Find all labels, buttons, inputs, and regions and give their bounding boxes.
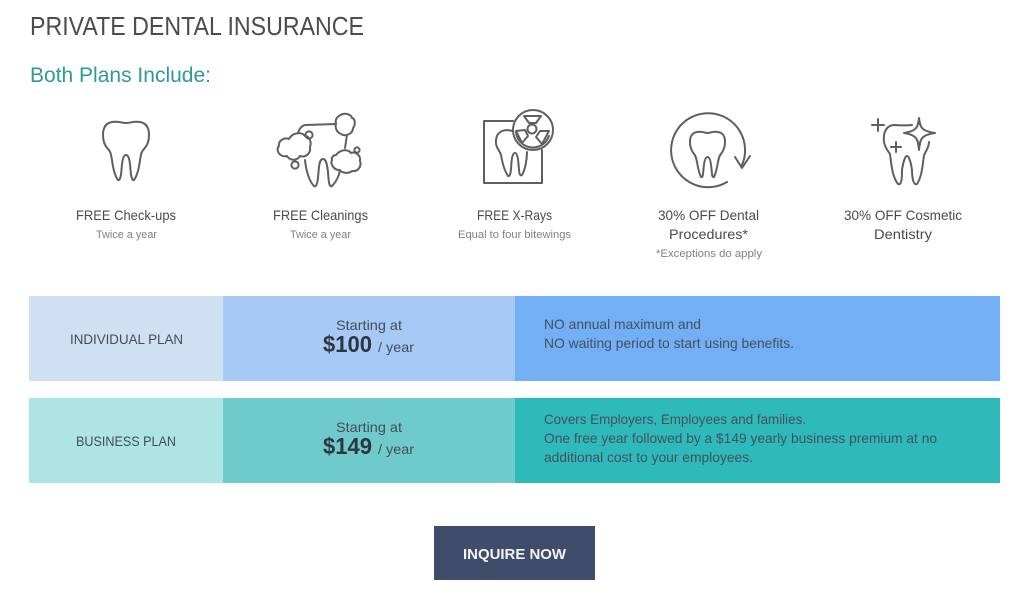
benefit: cosmetic dentistry: 30% OFF Cosmetic <box>844 207 962 223</box>
panel: business plan <box>29 398 1000 483</box>
benefit: cosmetic dentistry <box>844 118 962 242</box>
panel: business plan: / year <box>378 441 414 457</box>
benefit: cosmetic dentistry: Dentistry <box>874 226 932 242</box>
icon: tooth with bubbles <box>278 114 361 186</box>
benefit: dental procedures: 30% OFF Dental <box>658 207 759 223</box>
benefit: dental procedures: Procedures* <box>669 226 749 242</box>
button: inquire now: INQUIRE NOW <box>463 546 567 563</box>
title: PRIVATE DENTAL INSURANCE <box>30 11 364 41</box>
benefit: dental procedures: *Exceptions do apply <box>656 248 763 260</box>
panel: business plan: One free year followed by a $149 yearly business premium at no <box>544 430 937 446</box>
benefit: x-rays: FREE X-Rays <box>477 207 552 223</box>
button: inquire now <box>434 526 595 580</box>
benefit: check-ups <box>76 122 176 241</box>
panel: individual plan: INDIVIDUAL PLAN <box>70 331 183 347</box>
benefit: cleanings: Twice a year <box>290 229 351 241</box>
icon: x-ray with radiation symbol <box>484 110 553 183</box>
panel: business plan: $149 <box>323 433 372 459</box>
benefit: x-rays: Equal to four bitewings <box>458 229 571 241</box>
icon: tooth <box>103 122 149 180</box>
icon: tooth in circular arrow <box>671 113 750 187</box>
benefit: dental procedures <box>656 113 763 260</box>
panel: business plan: Covers Employers, Employees and families. <box>544 411 806 427</box>
icon: sparkling tooth <box>872 118 935 184</box>
panel: individual plan: $100 <box>323 331 372 357</box>
benefit: cleanings: FREE Cleanings <box>273 207 368 223</box>
panel: individual plan: NO annual maximum and <box>544 316 701 332</box>
benefit: check-ups: Twice a year <box>96 229 157 241</box>
panel: business plan: Starting at <box>336 419 402 435</box>
benefit: cleanings <box>273 114 368 241</box>
panel: individual plan <box>29 296 1000 381</box>
subheading: Both Plans Include: <box>30 64 211 87</box>
panel: individual plan: / year <box>378 339 414 355</box>
benefit: x-rays <box>458 110 571 241</box>
panel: business plan: BUSINESS PLAN <box>76 433 176 449</box>
panel: business plan: additional cost to your employees. <box>544 449 753 465</box>
panel: individual plan: Starting at <box>336 317 402 333</box>
panel: individual plan: NO waiting period to start using benefits. <box>544 335 794 351</box>
benefit: check-ups: FREE Check-ups <box>76 207 176 223</box>
